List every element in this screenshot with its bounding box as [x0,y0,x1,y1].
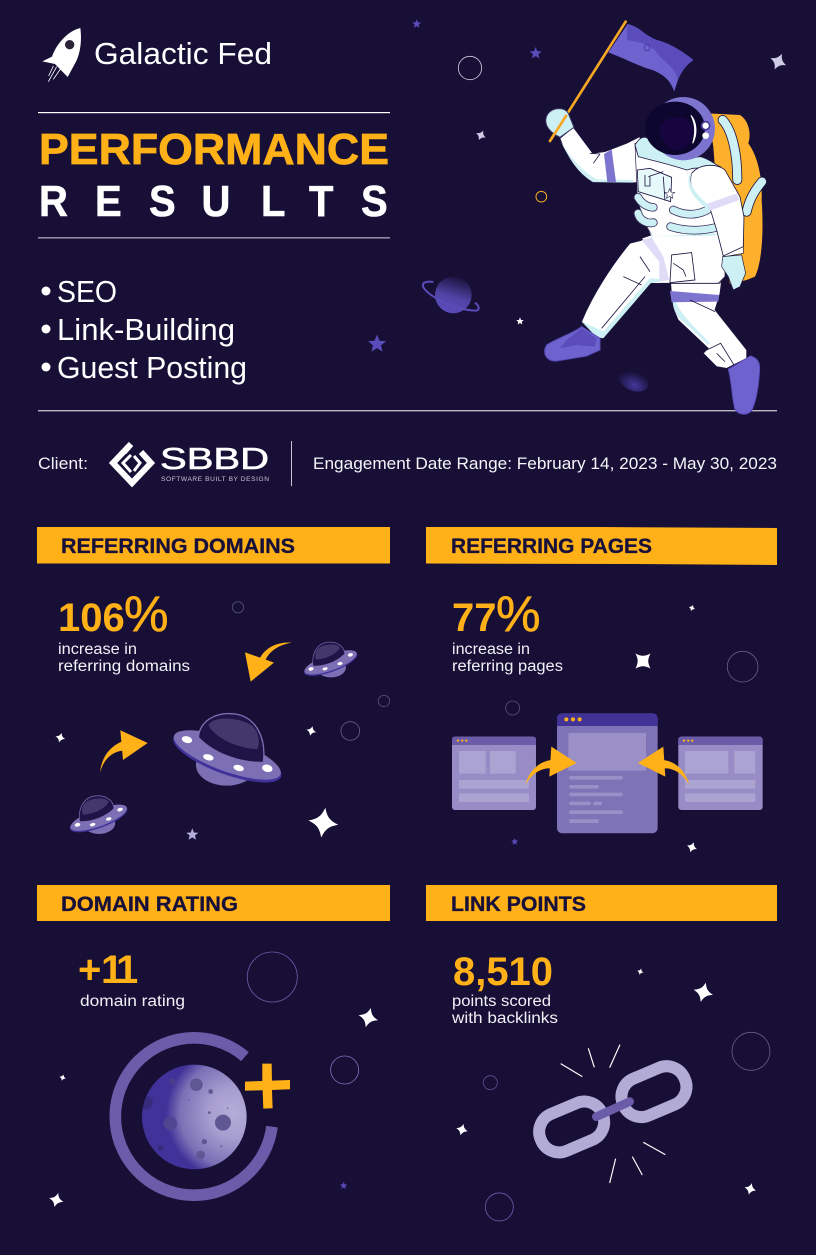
panel: domain rating [37,885,390,1209]
illustration: browser windows [452,604,763,854]
chest pack [637,168,672,202]
stat: 8,510: 8,510 [453,950,553,994]
icon: left window [452,737,536,810]
title: PERFORMANCE [39,126,389,174]
heading bar [426,527,777,565]
backpack [708,113,763,284]
rear leg [671,280,747,368]
icon: plus [245,1064,290,1109]
stat: 106%: 106 [58,596,125,640]
chest straps [638,197,717,230]
rear boot [728,356,760,414]
panel: referring pages [426,527,777,854]
illustration: chain link [455,968,770,1221]
icon: ringed planet [423,277,479,313]
heading bar: DOMAIN RATING [61,893,238,916]
service list: Link-Building [57,312,235,347]
panel: referring domains [37,527,390,840]
heading bar [37,527,390,564]
icon: right window [678,737,763,810]
decorative stars and rings [47,952,381,1209]
helmet [645,97,715,160]
icon: SBBD logo: SOFTWARE BUILT BY DESIGN [161,476,269,483]
decorative stars and rings [455,968,770,1221]
client row [38,441,777,486]
stat: +11: +11 [78,948,138,992]
icon: rocket [42,28,81,82]
icon: large saucer [168,714,287,793]
gloved hand and pole [546,109,574,137]
stat description: referring pages [452,658,563,675]
client label: Client: [38,455,88,473]
torso [635,143,743,283]
title [39,126,389,225]
stat: 77%: 77 [452,596,496,640]
icon: small saucer top [301,642,360,681]
spark lines [561,1045,665,1183]
front leg [582,240,660,338]
service list: SEO [57,274,117,309]
icon: center window [557,713,658,833]
service list [42,274,247,385]
heading bar [426,885,777,921]
icon: moon [139,1065,247,1169]
logo wordmark: Galactic Fed [94,36,272,71]
stat description: increase in [58,641,137,658]
panel: link points [426,885,777,1221]
front boot [545,327,600,361]
icon: flag [550,22,693,141]
icon: chain [533,1060,692,1158]
stat description: referring domains [58,658,190,675]
stat description: with backlinks [451,1010,558,1027]
hip pocket [670,253,695,283]
progress ring [115,1038,272,1195]
stat description: increase in [452,641,530,658]
decorative stars and rings [54,602,390,840]
heading bar: REFERRING DOMAINS [61,535,295,558]
illustration: flying saucers [54,602,390,840]
title: RESULTS [39,176,388,225]
icon: SBBD logo: SBBD [160,441,269,476]
icon: small saucer bottom [67,796,130,838]
arrow: right to center [638,747,689,785]
arrow: left to center [525,747,577,785]
background stars and planet: hero [412,19,790,396]
arrow: bottom [100,730,148,773]
stat: 77%: % [496,586,540,642]
illustration: moon with ring [47,952,381,1209]
raised arm [560,127,643,183]
logo: Galactic Fed [42,28,272,82]
stat description: domain rating [80,993,185,1010]
arrow: top [245,643,292,682]
service list: Guest Posting [57,350,247,385]
heading bar [37,885,390,921]
astronaut illustration [545,22,763,414]
right arm [691,165,744,256]
icon: SBBD logo [113,441,269,483]
heading bar: REFERRING PAGES [451,535,652,558]
heading bar: LINK POINTS [451,893,586,916]
decorative stars and rings [506,604,758,854]
stat description: points scored [452,993,551,1010]
engagement date range: Engagement Date Range: February 14, 2023 - May 30, 2023 [313,455,777,473]
stat: 106%: % [124,586,168,642]
